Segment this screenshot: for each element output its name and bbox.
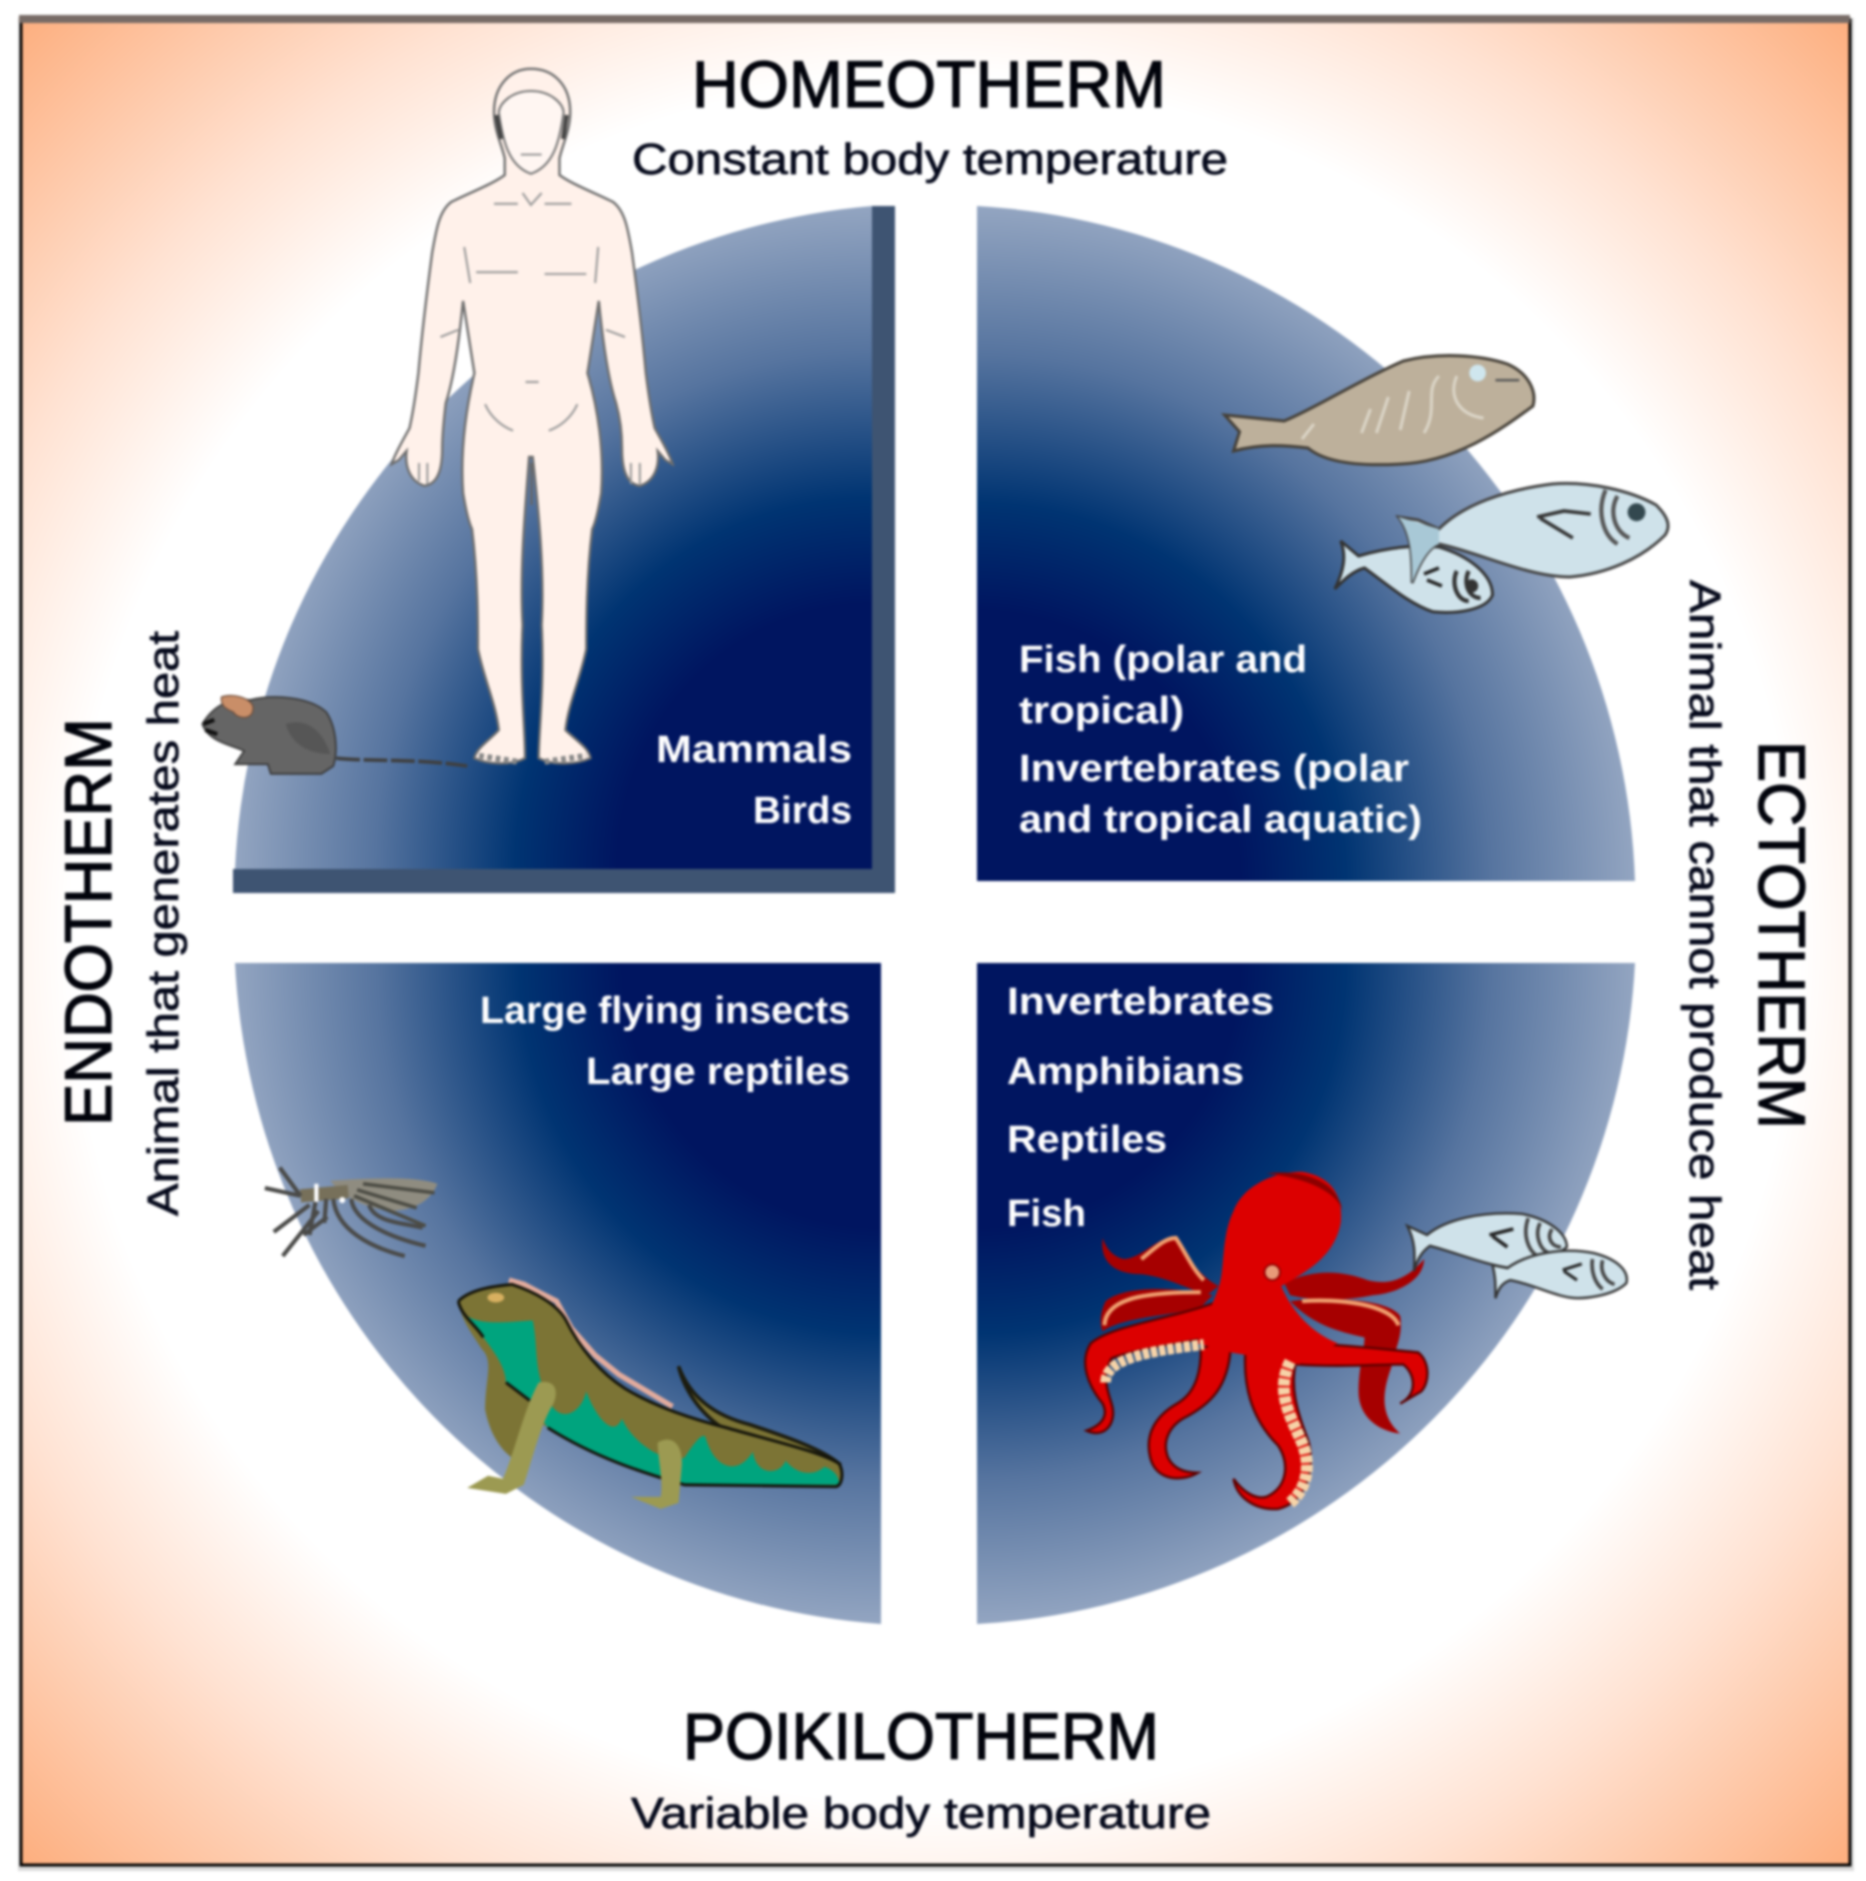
panel: poikilotherm ectotherm quadrant bbox=[977, 963, 1635, 1624]
subtitle: animal that cannot produce heat: Animal that cannot produce heat bbox=[1680, 580, 1729, 1290]
text: large insects and reptiles: Large reptiles bbox=[586, 1051, 850, 1093]
subtitle: variable body temperature: Variable body temperature bbox=[631, 1789, 1211, 1838]
text: large insects and reptiles: Large flying insects bbox=[480, 990, 850, 1032]
text: invertebrates amphibians reptiles fish: Reptiles bbox=[1007, 1119, 1167, 1161]
text: invertebrates amphibians reptiles fish: Fish bbox=[1007, 1193, 1086, 1235]
text: invertebrates amphibians reptiles fish: Invertebrates bbox=[1007, 981, 1274, 1023]
icon: pair of silver fish bbox=[1407, 1213, 1627, 1298]
icon: iguana bbox=[458, 1280, 842, 1509]
back arms bbox=[1101, 1238, 1424, 1434]
text: invertebrates amphibians reptiles fish bbox=[1007, 981, 1274, 1235]
text: invertebrates amphibians reptiles fish: Amphibians bbox=[1007, 1051, 1244, 1093]
subtitle: animal that generates heat: Animal that generates heat bbox=[139, 631, 188, 1216]
icon: octopus bbox=[1085, 1172, 1427, 1509]
panel: homeotherm ectotherm quadrant bbox=[977, 206, 1635, 881]
front arms and mantle bbox=[1085, 1301, 1427, 1509]
text: fish and invertebrates: Fish (polar and bbox=[1019, 639, 1307, 681]
title: poikilotherm: POIKILOTHERM bbox=[683, 1699, 1159, 1773]
icon: rat bbox=[202, 696, 467, 774]
label: birds: Birds bbox=[753, 790, 852, 832]
icon: small silver fish bbox=[1335, 541, 1492, 612]
text: fish and invertebrates: Invertebrates (polar bbox=[1019, 748, 1409, 790]
title: endotherm: ENDOTHERM bbox=[51, 718, 125, 1126]
icon: mosquito bbox=[265, 1168, 437, 1256]
title: homeotherm: HOMEOTHERM bbox=[692, 47, 1166, 121]
text: large insects and reptiles bbox=[480, 990, 850, 1093]
panel: homeotherm endotherm quadrant bbox=[233, 206, 895, 893]
label: mammals: Mammals bbox=[656, 729, 852, 771]
icon: human figure bbox=[392, 69, 673, 763]
title: ectotherm: ECTOTHERM bbox=[1745, 741, 1819, 1129]
subtitle: constant body temperature: Constant body temperature bbox=[632, 135, 1228, 184]
text: fish and invertebrates bbox=[1019, 639, 1422, 841]
text: fish and invertebrates: tropical) bbox=[1019, 690, 1184, 732]
text: fish and invertebrates: and tropical aquatic) bbox=[1019, 799, 1422, 841]
panel: poikilotherm endotherm quadrant bbox=[235, 963, 881, 1624]
icon: large silver fish bbox=[1398, 483, 1668, 583]
icon: brown fish bbox=[1225, 356, 1534, 465]
